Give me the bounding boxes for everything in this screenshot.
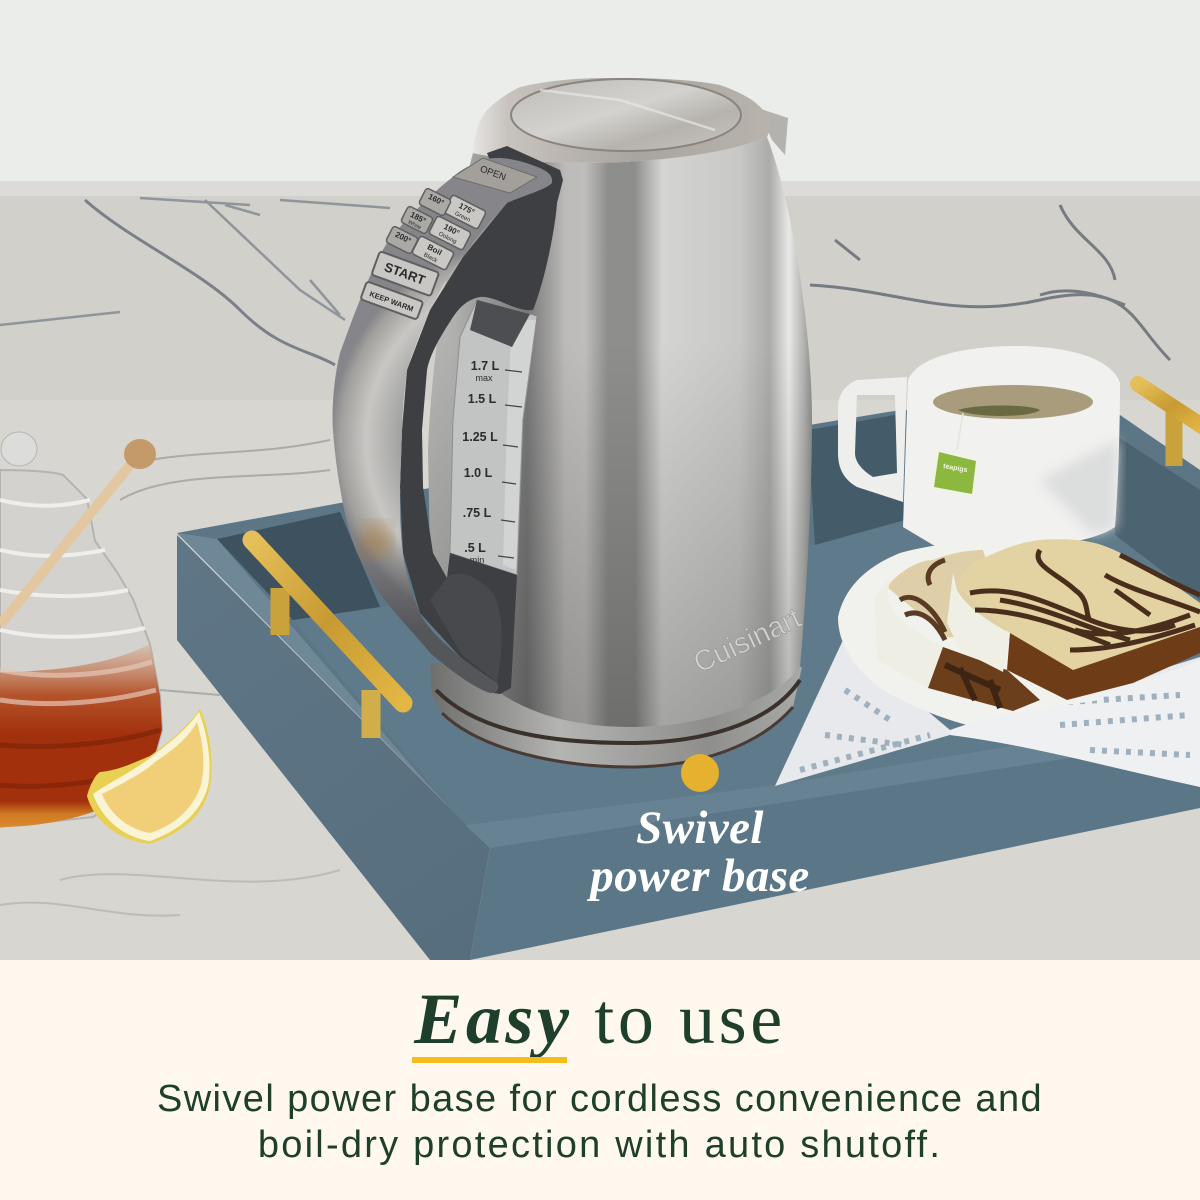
front face	[470, 738, 1200, 960]
lid logo band	[540, 90, 715, 130]
temperature 190	[429, 215, 471, 251]
tea bag	[958, 406, 1040, 416]
callout label	[586, 802, 810, 902]
lid disc	[511, 79, 741, 151]
yellow callout dot	[681, 754, 719, 792]
front slice frosting	[947, 573, 1010, 672]
tea tag: teapigs	[943, 463, 968, 474]
knob	[1, 432, 37, 466]
front slice crust	[1007, 627, 1200, 700]
dipper	[0, 460, 134, 625]
open button: OPEN	[478, 164, 507, 183]
description: boil-dry protection with auto shutoff.	[258, 1124, 942, 1166]
temperature 200	[385, 226, 419, 254]
temperature 175: Green	[453, 211, 471, 224]
open button	[453, 158, 537, 193]
keep warm button	[360, 281, 423, 320]
tea surface	[933, 385, 1093, 419]
front slice crumb	[957, 539, 1200, 670]
marble backsplash	[0, 181, 1200, 400]
product photo scene	[0, 0, 1200, 960]
serving tray	[177, 410, 1200, 960]
front slice swirls	[970, 550, 1200, 650]
front rim	[465, 715, 1200, 848]
heading underline	[412, 1057, 567, 1063]
temperature 160	[418, 188, 452, 216]
rear slice swirl	[900, 560, 945, 640]
tray inner walls	[217, 512, 380, 620]
water window: min	[470, 555, 484, 565]
brass handle right	[1138, 384, 1200, 466]
temperature 160: 160°	[427, 192, 446, 208]
lemon wedge	[87, 709, 212, 844]
heading: Easy to use	[414, 979, 786, 1059]
temperature 200: 200°	[394, 230, 413, 246]
water window: 1.5 L	[468, 392, 497, 406]
temperature 190: 190°	[442, 222, 461, 238]
kettle	[333, 78, 812, 767]
temperature 175	[444, 194, 486, 230]
keep warm button: KEEP WARM	[368, 289, 415, 314]
water window: 1.7 L	[471, 359, 500, 373]
plate	[838, 540, 1100, 725]
marble countertop	[0, 400, 1200, 960]
base bottom line	[442, 707, 793, 767]
mug handle	[838, 377, 907, 502]
water window: max	[475, 373, 493, 383]
temperature 185: White	[407, 219, 422, 231]
temperature 175: 175°	[457, 201, 476, 217]
honey jar	[0, 432, 162, 827]
kettle body	[428, 137, 812, 727]
kettle logo: Cuisinart	[689, 602, 806, 680]
boil: Boil	[426, 242, 443, 257]
control panel buttons	[360, 158, 537, 320]
body lower shading	[428, 137, 812, 727]
brass handle left	[252, 540, 403, 738]
callout label: Swivel	[636, 802, 764, 854]
start button: START	[382, 259, 427, 288]
mug shadow	[1040, 440, 1118, 535]
tea tag	[930, 448, 980, 498]
left face	[177, 535, 490, 960]
left rim	[177, 533, 490, 848]
cloth napkin	[775, 640, 1200, 787]
kettle base	[430, 663, 802, 767]
water window: .5 L	[464, 541, 486, 555]
water window: .75 L	[463, 506, 492, 520]
handle brass reflection	[360, 522, 392, 558]
start button	[371, 251, 439, 296]
base shadow ring	[436, 680, 800, 743]
description	[157, 1078, 1043, 1166]
rear slice crumb	[887, 550, 1010, 640]
tea mug	[838, 346, 1120, 549]
plate and marble cake	[838, 539, 1200, 725]
kettle spout	[758, 108, 788, 155]
grip lower bulb	[430, 573, 502, 682]
rear slice frosting	[875, 578, 943, 688]
handle dark grip	[400, 146, 563, 694]
rear slice crust	[928, 647, 1040, 711]
text panel	[0, 960, 1200, 1200]
tea bag string	[957, 413, 963, 450]
boil: Black	[422, 252, 439, 265]
water window: 1.0 L	[464, 466, 493, 480]
kettle shoulder	[473, 78, 770, 163]
callout label: power base	[586, 850, 810, 902]
water window	[450, 300, 537, 575]
temperature 185: 185°	[409, 210, 428, 226]
handle silver	[333, 158, 552, 693]
temperature 190: Oolong	[437, 231, 457, 245]
tray floor and back rim	[177, 410, 1200, 848]
wall	[0, 0, 1200, 181]
water window: 1.25 L	[462, 430, 498, 444]
boil	[412, 235, 454, 271]
description: Swivel power base for cordless convenience and	[157, 1078, 1043, 1120]
mug body	[903, 346, 1120, 549]
temperature 185	[400, 206, 434, 234]
handle lower shading	[340, 487, 498, 693]
